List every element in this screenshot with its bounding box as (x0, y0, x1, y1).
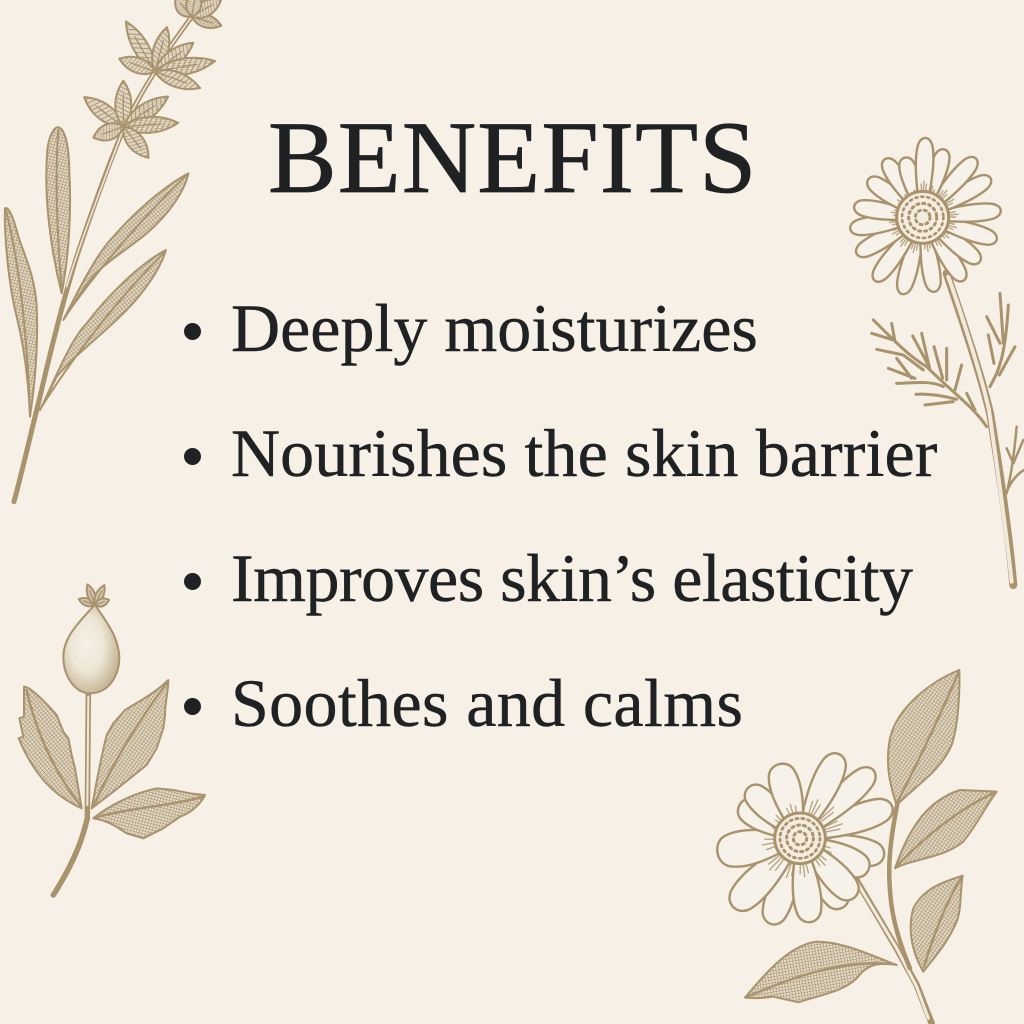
bud (63, 604, 119, 693)
leaf upright (46, 127, 70, 293)
main stems (853, 798, 932, 1023)
serrated leaf left (19, 687, 82, 808)
leaf top (888, 670, 959, 805)
bullet list (184, 290, 938, 741)
leaf right (895, 790, 997, 868)
right fern branch (987, 293, 1015, 387)
bullet 1: Deeply moisturizes (231, 290, 758, 366)
leaf lower right (40, 250, 166, 410)
bullet 3: Improves skin’s elasticity (231, 540, 912, 616)
leaf small (911, 876, 963, 972)
bud sepals (77, 583, 110, 608)
bud stem (53, 693, 88, 895)
icon: daisy and leaves bottom right (714, 670, 997, 1023)
bullet 4: Soothes and calms (231, 665, 743, 741)
icon: daisy top right (849, 138, 1024, 585)
sprig stem (14, 0, 208, 502)
serrated leaf lower (93, 788, 205, 838)
petal cluster middle (117, 18, 216, 95)
icon: herb sprig top left (5, 0, 225, 502)
daisy stem (947, 273, 1013, 585)
daisy head (849, 138, 1002, 296)
petal cluster lower (79, 81, 179, 163)
large daisy head (714, 748, 897, 928)
leaf upper right (63, 173, 188, 320)
lower fern branch (1007, 427, 1024, 493)
serrated leaf right (92, 680, 168, 808)
title: BENEFITS (268, 101, 758, 215)
leaf far left (5, 208, 37, 417)
petal cluster top (170, 0, 225, 32)
bullet 2: Nourishes the skin barrier (231, 415, 937, 491)
icon: rosebud bottom left (19, 583, 205, 895)
left fern branch (872, 320, 987, 427)
leaf bottom (745, 942, 897, 1002)
